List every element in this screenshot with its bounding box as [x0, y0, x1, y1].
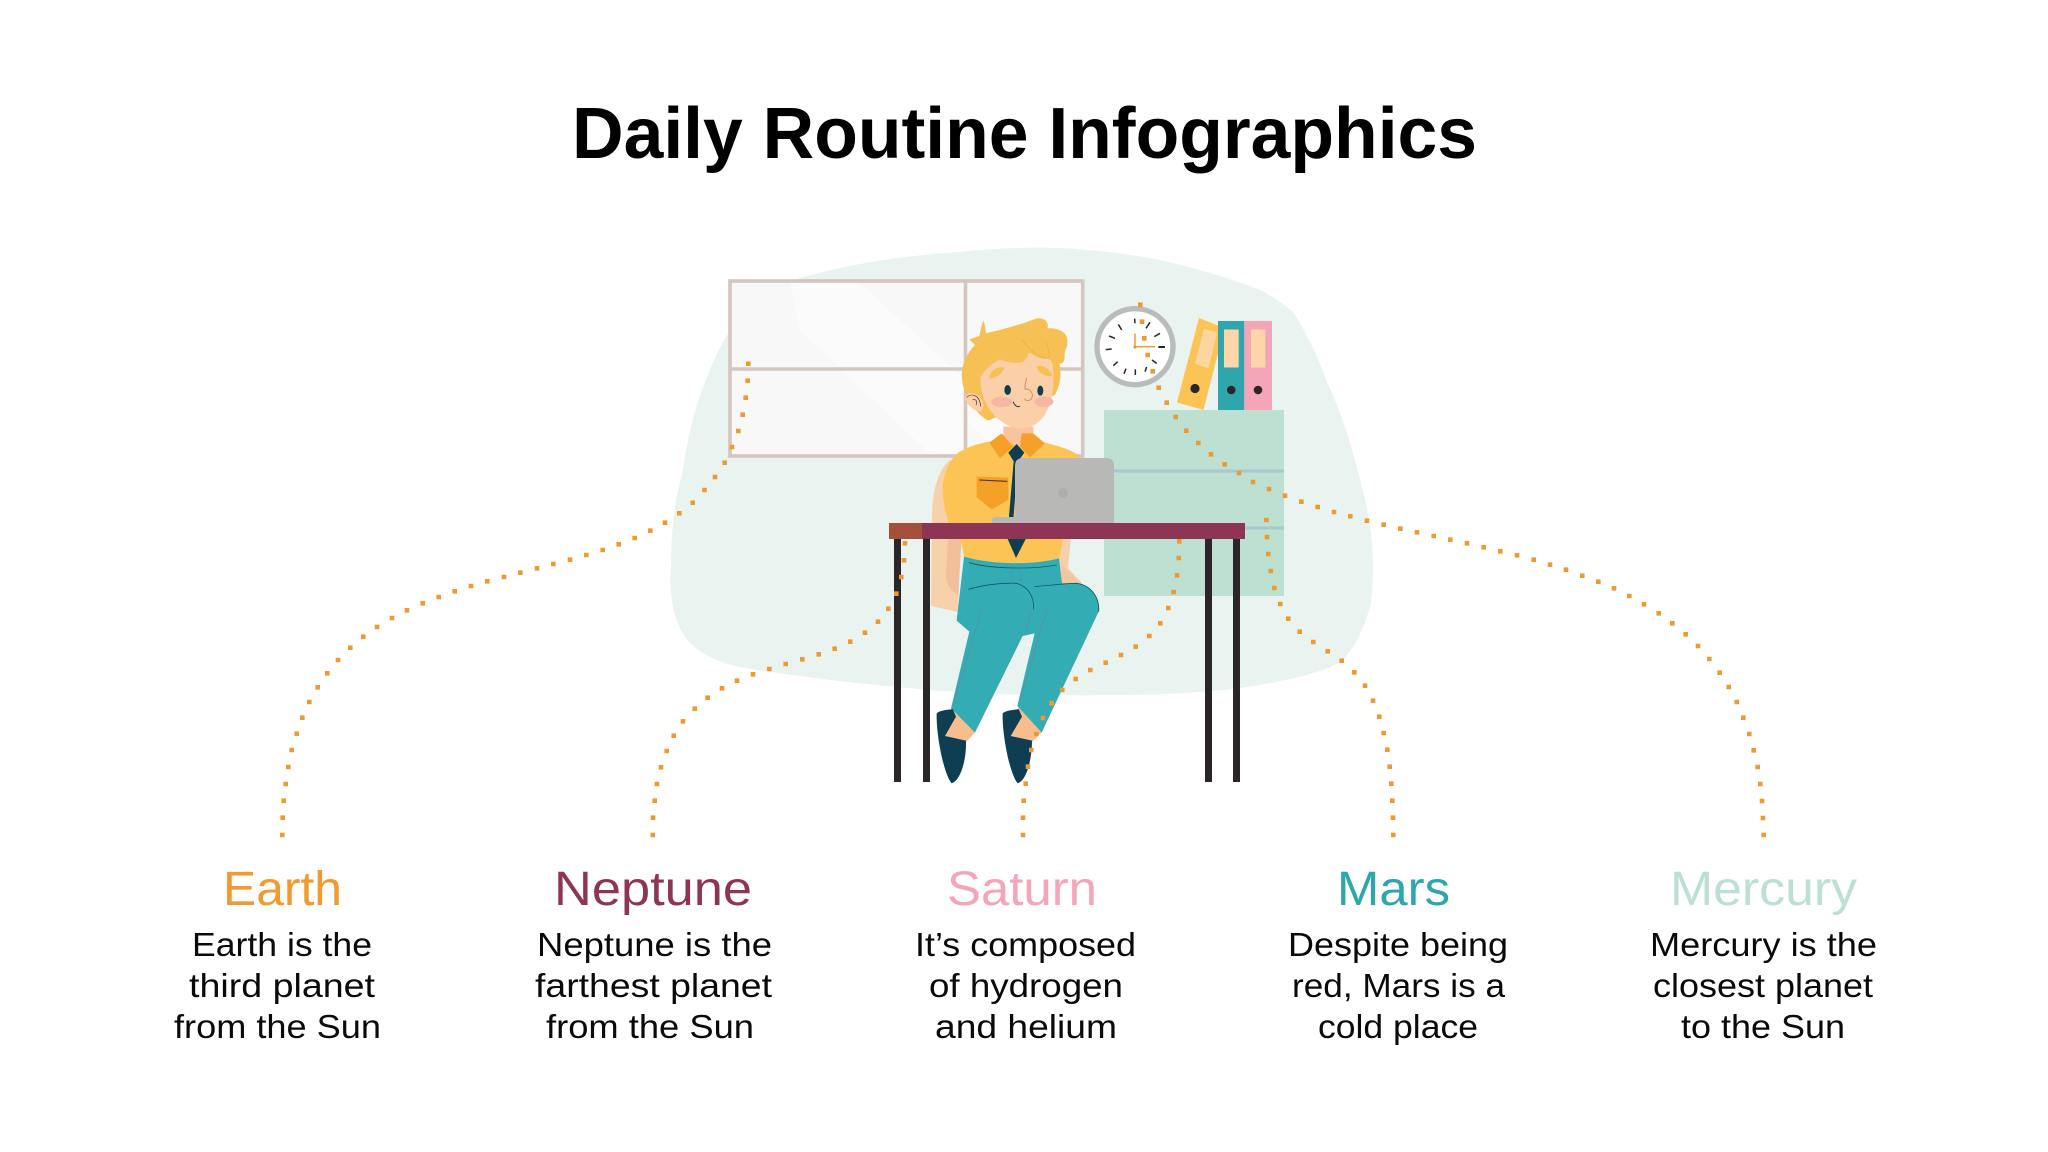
text: Saturn description: and helium — [935, 1008, 1117, 1045]
connector: Saturn — [1023, 541, 1179, 835]
text: Saturn description — [915, 926, 1136, 1045]
column: Saturn — [915, 863, 1136, 1045]
background blob — [670, 248, 1373, 695]
title: Daily Routine Infographics — [572, 94, 1477, 174]
shoes — [937, 709, 1032, 783]
text: Neptune description: from the Sun — [546, 1008, 754, 1045]
text: Neptune description — [535, 926, 772, 1045]
blush — [991, 397, 1012, 407]
pocket — [977, 477, 1008, 509]
mouth — [1013, 402, 1020, 407]
text: Neptune description: Neptune is the — [537, 926, 772, 963]
illustration: person working at desk — [670, 248, 1373, 783]
text: Mercury description: Mercury is the — [1650, 926, 1877, 963]
left arm — [931, 460, 962, 612]
fringe — [977, 332, 1059, 364]
column: Earth — [174, 863, 381, 1045]
window — [730, 281, 1083, 456]
eyes — [1004, 385, 1011, 395]
dotted connectors — [282, 305, 1764, 835]
laptop — [992, 458, 1114, 523]
text: Earth description: from the Sun — [174, 1008, 381, 1045]
text: Mars description: Despite being — [1288, 926, 1508, 963]
text: Mercury description: to the Sun — [1681, 1008, 1845, 1045]
nose — [1025, 378, 1032, 401]
connector: Neptune — [653, 543, 905, 835]
text: Mars description: red, Mars is a — [1292, 967, 1506, 1004]
hair back — [962, 318, 1067, 421]
cabinet — [1104, 410, 1284, 596]
trousers — [951, 557, 1099, 733]
ankles — [945, 707, 1042, 742]
heading: Neptune: Neptune — [554, 863, 752, 916]
eyebrows — [989, 366, 1052, 378]
heading: Mars: Mars — [1337, 863, 1450, 916]
right arm — [1055, 535, 1082, 590]
heading: Mercury: Mercury — [1670, 863, 1857, 916]
upper body — [943, 318, 1083, 533]
connector: Mars — [1266, 520, 1393, 835]
collar — [989, 433, 1045, 458]
heading: Saturn: Saturn — [947, 863, 1097, 916]
icon: wall clock — [1097, 309, 1173, 385]
text: Mercury description: closest planet — [1653, 967, 1873, 1004]
arm shadow — [946, 537, 962, 595]
pants — [937, 537, 1099, 783]
text: Earth description — [174, 926, 381, 1045]
icon: binders — [1177, 318, 1272, 410]
connector: Earth — [282, 364, 748, 835]
heading: Earth: Earth — [223, 863, 342, 916]
tie — [1008, 444, 1024, 520]
neck — [1003, 427, 1033, 447]
text: Mars description — [1288, 926, 1508, 1045]
column: Mars — [1288, 863, 1508, 1045]
text: Mars description: cold place — [1318, 1008, 1478, 1045]
connector: Mercury — [1140, 305, 1764, 835]
tie end — [1008, 539, 1026, 558]
lower shirt — [960, 537, 1063, 563]
face — [981, 353, 1054, 428]
person — [931, 318, 1099, 783]
text: Saturn description: of hydrogen — [929, 967, 1123, 1004]
column: Mercury — [1650, 863, 1877, 1045]
text: Neptune description: farthest planet — [535, 967, 772, 1004]
text: Mercury description — [1650, 926, 1877, 1045]
ear — [965, 393, 983, 412]
text: Earth description: Earth is the — [192, 926, 372, 963]
text: Earth description: third planet — [189, 967, 375, 1004]
skin: hand — [1062, 565, 1082, 588]
column: Neptune — [535, 863, 772, 1045]
desk — [889, 523, 1245, 782]
text: Saturn description: It’s composed — [915, 926, 1136, 963]
shirt — [943, 442, 1083, 533]
